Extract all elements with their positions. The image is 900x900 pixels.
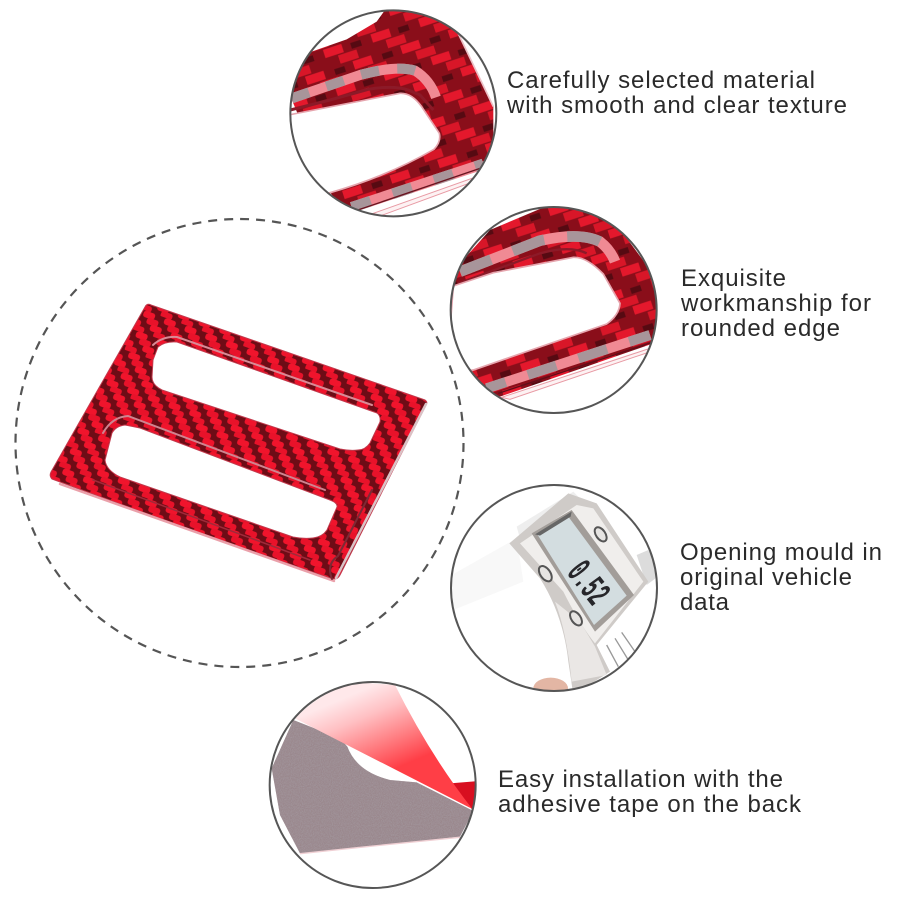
caption: workmanship: rounded edge [681,315,840,342]
bevel highlights [60,337,426,581]
caption: workmanship [680,265,871,342]
caliper body [509,493,648,695]
caption: opening mould: data [680,589,730,616]
caliper buttons [536,525,609,628]
caption: installation: Easy installation with the [498,766,783,793]
detail circle 1: material texture [289,9,498,218]
caption: material [506,67,847,119]
LCD reading: 0.52 [557,554,617,614]
detail circle 4: adhesive tape backing [268,681,477,889]
caption: material: Carefully selected material [507,67,815,94]
caption: workmanship: workmanship for [680,290,871,317]
caption: material: with smooth and clear texture [506,92,847,119]
caption: workmanship: Exquisite [681,265,786,292]
LCD frame and screen [532,510,634,632]
fingertip [533,678,568,690]
detail circle 2: rounded edge [450,206,658,414]
caption: installation [498,766,802,818]
caption: installation: adhesive tape on the back [498,791,802,818]
detail circle 3: digital caliper [450,484,658,692]
caption: opening mould [680,539,882,616]
caption: opening mould: original vehicle [680,564,852,591]
dashed circle around main product [16,219,464,667]
caption: opening mould: Opening mould in [680,539,882,566]
main product: red carbon fibre panel [50,304,427,581]
